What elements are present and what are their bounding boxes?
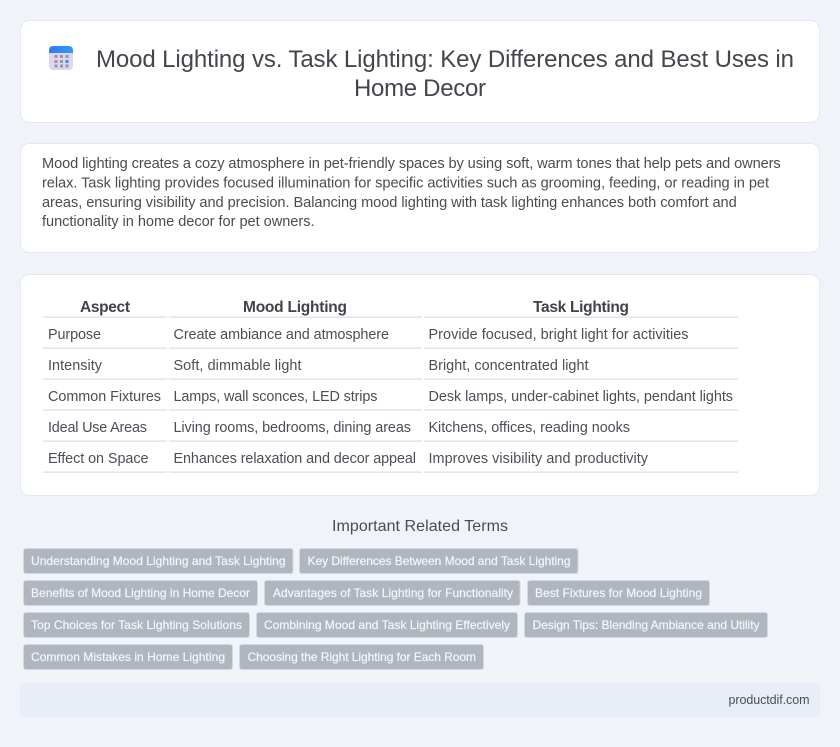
panel: comparison table <box>20 274 820 496</box>
tag: Common Mistakes in Home Lighting <box>31 650 225 664</box>
tag <box>24 612 250 638</box>
table row: ideal use areas: Ideal Use Areas <box>48 420 147 436</box>
tag <box>300 548 578 574</box>
intro paragraph: areas, ensuring visibility and precision. Balancing mood lighting with task lighting enhances both comfort and <box>42 195 737 211</box>
table row: common fixtures: Lamps, wall sconces, LED strips <box>174 389 378 405</box>
table header row <box>43 299 738 318</box>
table row: common fixtures: Common Fixtures <box>48 389 161 405</box>
table row: purpose <box>43 327 738 349</box>
table row: common fixtures: Desk lamps, under-cabinet lights, pendant lights <box>428 389 733 405</box>
tag <box>24 548 293 574</box>
tag <box>524 612 768 638</box>
table header row: Mood Lighting <box>243 299 347 316</box>
tag: Choosing the Right Lighting for Each Room <box>248 650 476 664</box>
table row: intensity: Soft, dimmable light <box>174 358 302 374</box>
table header row: Task Lighting <box>533 299 629 316</box>
table header row: Aspect <box>80 299 130 316</box>
tag: Understanding Mood Lighting and Task Lighting <box>31 554 286 568</box>
tag list: related terms <box>24 548 768 670</box>
tag: Advantages of Task Lighting for Functionality <box>273 586 513 600</box>
panel: title header <box>20 20 820 122</box>
intro paragraph <box>42 156 781 230</box>
table row: effect on space <box>43 451 738 473</box>
intro paragraph: functionality in home decor for pet owners. <box>42 214 314 230</box>
tag: Combining Mood and Task Lighting Effectively <box>264 618 510 632</box>
tag <box>24 580 258 606</box>
tag: Design Tips: Blending Ambiance and Utility <box>532 618 760 632</box>
intro paragraph: Mood lighting creates a cozy atmosphere in pet-friendly spaces by using soft, warm tones that help pets and owners <box>42 156 781 172</box>
table row: ideal use areas: Kitchens, offices, reading nooks <box>428 420 630 436</box>
table row: ideal use areas <box>43 420 738 442</box>
tag <box>24 644 232 670</box>
tag: Best Fixtures for Mood Lighting <box>535 586 702 600</box>
tag: Key Differences Between Mood and Task Lighting <box>308 554 570 568</box>
table row: effect on space: Improves visibility and productivity <box>428 451 649 467</box>
tag <box>528 580 710 606</box>
table row: intensity <box>43 358 738 380</box>
table row: effect on space: Effect on Space <box>48 451 148 467</box>
tag <box>264 580 520 606</box>
table row: intensity: Bright, concentrated light <box>428 358 588 374</box>
tag: Benefits of Mood Lighting in Home Decor <box>31 586 250 600</box>
footer bar <box>20 683 820 717</box>
tag: Top Choices for Task Lighting Solutions <box>31 618 242 632</box>
title: Mood Lighting vs. Task Lighting: Key Differences and Best Uses in <box>96 46 794 73</box>
tag <box>256 612 518 638</box>
table row: purpose: Provide focused, bright light for activities <box>428 327 688 343</box>
table row: purpose: Purpose <box>48 327 101 343</box>
title: Home Decor <box>354 75 486 102</box>
table row: purpose: Create ambiance and atmosphere <box>174 327 389 343</box>
panel: introduction <box>20 144 820 252</box>
heading: important related terms: Important Related Terms <box>332 518 508 535</box>
table row: ideal use areas: Living rooms, bedrooms, dining areas <box>174 420 411 436</box>
title <box>96 46 794 102</box>
table row: intensity: Intensity <box>48 358 103 374</box>
table row: common fixtures <box>43 389 738 411</box>
footer bar: productdif.com <box>728 693 810 707</box>
table row: effect on space: Enhances relaxation and decor appeal <box>174 451 416 467</box>
tag <box>240 644 484 670</box>
intro paragraph: relax. Task lighting provides focused illumination for specific activities such as grooming, feeding, or reading in pet <box>42 176 769 192</box>
icon: calendar <box>49 46 73 70</box>
